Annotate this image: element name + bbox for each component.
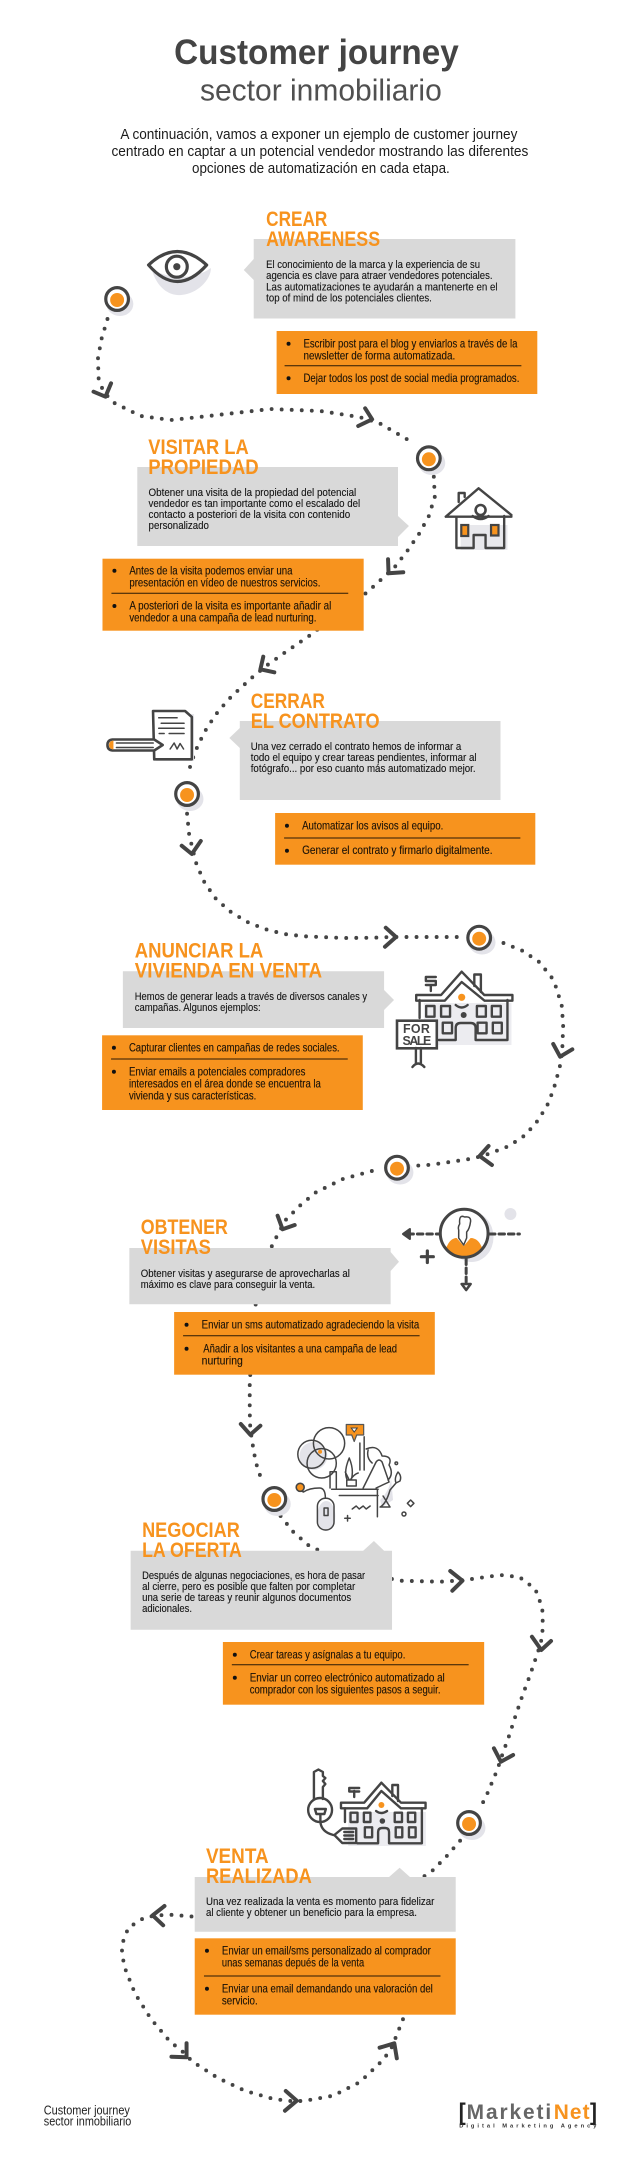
panel: visitar la propiedad bbox=[102, 436, 511, 631]
heading: CERRAR bbox=[251, 690, 325, 713]
dotted journey path bbox=[98, 319, 563, 2101]
automation list: Capturar clientes en campañas de redes sociales. bbox=[129, 1042, 340, 1055]
icon: woman working at desk bbox=[296, 1424, 414, 1531]
intro text: centrado en captar a un potencial vendedor mostrando las diferentes bbox=[111, 144, 528, 160]
heading: EL CONTRATO bbox=[251, 710, 380, 733]
description box bbox=[244, 239, 515, 318]
automation list bbox=[102, 559, 364, 631]
title: sector inmobiliario bbox=[200, 72, 442, 108]
icon: house for sale bbox=[397, 972, 512, 1067]
description box bbox=[195, 1868, 456, 1932]
logo: MarketiNet bbox=[459, 2099, 597, 2129]
description text: adicionales. bbox=[142, 1603, 192, 1615]
automation list: servicio. bbox=[222, 1995, 258, 2008]
automation list: Enviar una email demandando una valoración del bbox=[222, 1983, 433, 1996]
logo: MarketiNet: ] bbox=[590, 2099, 597, 2126]
description text bbox=[135, 991, 367, 1014]
description text: Obtener visitas y asegurarse de aprovecharlas al bbox=[141, 1268, 350, 1280]
description text: top of mind de los potenciales clientes. bbox=[266, 292, 432, 305]
description text: una serie de tareas y reunir algunos documentos bbox=[142, 1592, 351, 1604]
automation list bbox=[102, 1035, 363, 1110]
journey milestone markers bbox=[106, 287, 496, 1840]
intro text bbox=[111, 127, 528, 177]
description text bbox=[149, 487, 360, 532]
automation list: Automatizar los avisos al equipo. bbox=[302, 820, 443, 833]
description text: al cierre, pero es posible que falten por completar bbox=[142, 1581, 355, 1593]
description box bbox=[137, 467, 409, 546]
logo: MarketiNet: Net bbox=[554, 2101, 590, 2124]
icon: eye bbox=[149, 252, 211, 295]
heading bbox=[148, 436, 259, 479]
logo: MarketiNet: Marketi bbox=[467, 2101, 551, 2124]
description text: máximo es clave para conseguir la venta. bbox=[141, 1279, 315, 1291]
panel: venta realizada bbox=[195, 1770, 456, 2015]
automation list bbox=[174, 1312, 435, 1375]
automation list: Antes de la visita podemos enviar una bbox=[129, 565, 293, 578]
automation list: presentación en vídeo de nuestros servicios. bbox=[129, 577, 320, 590]
description text: El conocimiento de la marca y la experiencia de su bbox=[266, 259, 480, 271]
automation list: Enviar un correo electrónico automatizado al bbox=[250, 1672, 445, 1685]
heading: CREAR bbox=[266, 208, 327, 231]
description text: vendedor es tan importante como el escalado del bbox=[149, 498, 360, 510]
description text: contacto a posteriori de la visita con contenido bbox=[149, 509, 350, 521]
description text: Después de algunas negociaciones, es hora de pasar bbox=[142, 1570, 365, 1582]
automation list: Escribir post para el blog y enviarlos a través de la bbox=[303, 338, 518, 351]
automation list: Dejar todos los post de social media programados. bbox=[303, 373, 519, 385]
logo: MarketiNet: Digital Marketing Agency bbox=[459, 2123, 597, 2129]
automation list: Enviar emails a potenciales compradores bbox=[129, 1066, 306, 1079]
description text: Una vez realizada la venta es momento para fidelizar bbox=[206, 1896, 435, 1908]
logo: MarketiNet: [ bbox=[459, 2099, 466, 2126]
icon: key and sold house bbox=[308, 1770, 426, 1846]
automation list: nurturing bbox=[202, 1355, 243, 1368]
heading: AWARENESS bbox=[266, 228, 380, 251]
automation list bbox=[195, 1938, 456, 2015]
automation list: Crear tareas y asígnalas a tu equipo. bbox=[250, 1649, 405, 1662]
description text bbox=[142, 1570, 365, 1615]
description text: todo el equipo y crear tareas pendientes, informar al bbox=[251, 752, 477, 764]
panel: negociar la oferta bbox=[131, 1424, 484, 1705]
title bbox=[174, 33, 459, 108]
icon: house bbox=[446, 488, 511, 550]
automation list: vivienda y sus características. bbox=[129, 1090, 256, 1103]
heading: NEGOCIAR bbox=[142, 1519, 240, 1542]
description text: Obtener una visita de la propiedad del potencial bbox=[149, 487, 356, 499]
heading: VISITAR LA bbox=[148, 436, 249, 459]
panel: crear awareness bbox=[149, 208, 537, 394]
icon: contract and pencil bbox=[107, 711, 194, 761]
description text: fotógrafo... por eso cuanto más automatizado mejor. bbox=[251, 763, 476, 775]
automation list: comprador con los siguientes pasos a seguir. bbox=[250, 1684, 440, 1697]
automation list bbox=[223, 1642, 484, 1705]
description box bbox=[129, 1248, 399, 1304]
heading bbox=[251, 690, 380, 733]
heading: REALIZADA bbox=[206, 1865, 312, 1888]
heading bbox=[266, 208, 380, 251]
automation list: Añadir a los visitantes a una campaña de lead bbox=[203, 1343, 397, 1356]
direction arrows bbox=[94, 383, 572, 2111]
heading: LA OFERTA bbox=[142, 1539, 242, 1562]
heading bbox=[142, 1519, 242, 1562]
description text bbox=[266, 259, 497, 305]
icon: visitor with arrows bbox=[403, 1208, 519, 1290]
automation list: A posteriori de la visita es importante añadir al bbox=[129, 600, 331, 613]
heading: VISITAS bbox=[141, 1236, 211, 1259]
heading bbox=[141, 1216, 228, 1259]
automation list: Generar el contrato y firmarlo digitalmente. bbox=[302, 845, 493, 857]
heading: ANUNCIAR LA bbox=[135, 940, 263, 963]
panel: obtener visitas bbox=[129, 1208, 519, 1375]
automation list: interesados en el área donde se encuentra la bbox=[129, 1078, 321, 1091]
automation list: unas semanas depués de la venta bbox=[222, 1957, 365, 1970]
description box bbox=[131, 1541, 392, 1630]
heading: VENTA bbox=[206, 1845, 269, 1868]
footer title: sector inmobiliario bbox=[44, 2113, 131, 2128]
automation list: Enviar un sms automatizado agradeciendo la visita bbox=[202, 1319, 420, 1332]
heading: PROPIEDAD bbox=[148, 456, 259, 479]
footer title: Customer journey bbox=[44, 2102, 130, 2117]
automation list bbox=[275, 813, 535, 865]
description text: agencia es clave para atraer vendedores potenciales. bbox=[266, 270, 493, 282]
automation list: Enviar un email/sms personalizado al comprador bbox=[222, 1945, 431, 1958]
description box bbox=[229, 721, 500, 800]
description box bbox=[123, 971, 394, 1028]
description text: Las automatizaciones te ayudarán a mantenerte en el bbox=[266, 281, 497, 294]
automation list: vendedor a una campaña de lead nurturing. bbox=[129, 612, 316, 625]
description text bbox=[206, 1896, 435, 1919]
automation list: newsletter de forma automatizada. bbox=[303, 350, 455, 363]
description text: personalizado bbox=[149, 520, 209, 532]
icon: house for sale: FOR bbox=[403, 1022, 430, 1036]
panel: anunciar la vivienda en venta bbox=[102, 940, 512, 1110]
panel: cerrar el contrato bbox=[107, 690, 535, 865]
intro text: A continuación, vamos a exponer un ejemplo de customer journey bbox=[120, 127, 518, 143]
heading bbox=[135, 940, 322, 983]
description text bbox=[141, 1268, 350, 1291]
description text: Una vez cerrado el contrato hemos de informar a bbox=[251, 741, 462, 753]
heading bbox=[206, 1845, 312, 1888]
intro text: opciones de automatización en cada etapa. bbox=[192, 161, 450, 177]
description text: campañas. Algunos ejemplos: bbox=[135, 1002, 261, 1014]
heading: VIVIENDA EN VENTA bbox=[135, 960, 322, 983]
description text bbox=[251, 741, 477, 775]
description text: al cliente y obtener un beneficio para la empresa. bbox=[206, 1907, 417, 1919]
heading: OBTENER bbox=[141, 1216, 228, 1239]
description text: Hemos de generar leads a través de diversos canales y bbox=[135, 991, 367, 1003]
footer title bbox=[44, 2102, 131, 2128]
icon: house for sale: SALE bbox=[402, 1034, 431, 1048]
title: Customer journey bbox=[174, 33, 459, 72]
automation list bbox=[277, 331, 537, 394]
